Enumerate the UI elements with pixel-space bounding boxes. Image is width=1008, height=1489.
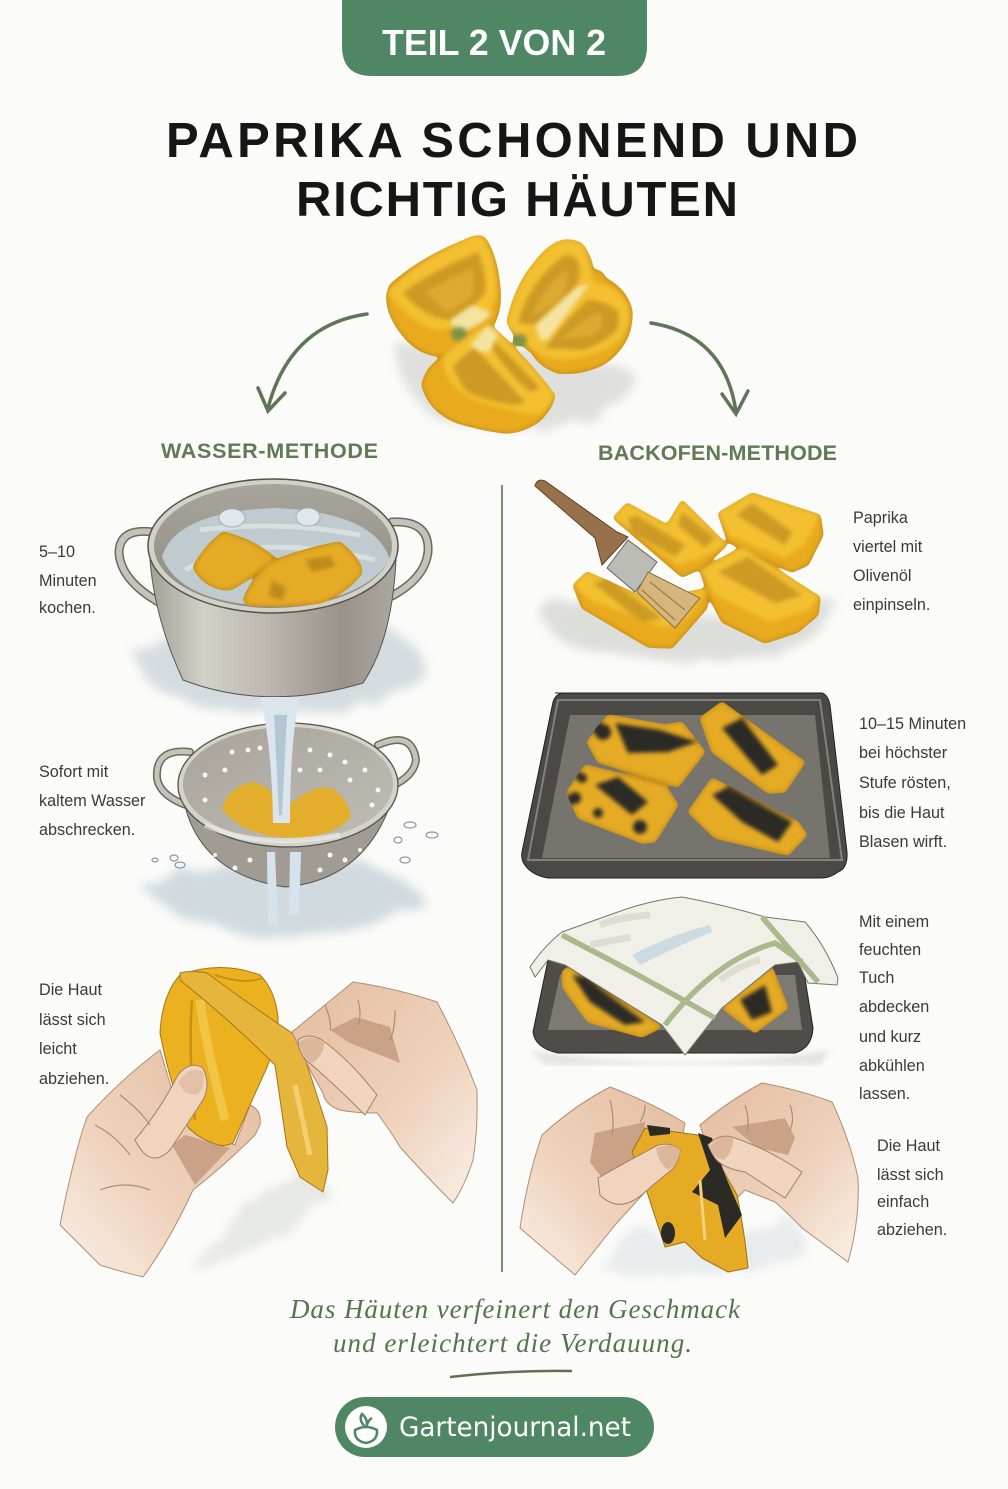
- text: peel step water: Die Haut: [39, 981, 102, 999]
- text: oil step: Paprika: [853, 509, 908, 527]
- text: boil step: [39, 543, 97, 617]
- footer badge: [335, 1397, 654, 1457]
- text: rinse step: kaltem Wasser: [39, 792, 146, 810]
- left thumb: [135, 1065, 207, 1158]
- text: roast step: bis die Haut: [859, 804, 945, 822]
- text: peel step water: [39, 981, 109, 1088]
- peeled skin strip: [180, 972, 328, 1192]
- text: peel step water: leicht: [39, 1040, 77, 1058]
- arrow: to water method: [258, 314, 367, 411]
- text: peel step oven: abziehen.: [877, 1221, 947, 1239]
- text: rinse step: Sofort mit: [39, 763, 109, 781]
- left hand: [520, 1087, 685, 1275]
- closing note: und erleichtert die Verdauung.: [333, 1328, 692, 1358]
- banner: part label: TEIL 2 VON 2: [382, 22, 606, 63]
- underline stroke: [450, 1371, 572, 1377]
- text: peel step oven: [877, 1137, 947, 1239]
- illustration: halved yellow peppers: [387, 236, 632, 433]
- title: RICHTIG HÄUTEN: [296, 173, 738, 227]
- arrow: to oven method: [651, 323, 748, 414]
- text: roast step: 10–15 Minuten: [859, 715, 966, 733]
- text: rinse step: [39, 763, 146, 839]
- closing note: [289, 1294, 741, 1358]
- text: boil step: 5–10: [39, 543, 75, 561]
- roasted pepper pieces: [567, 702, 807, 855]
- text: cover step: abdecken: [859, 998, 929, 1016]
- text: oil step: viertel mit: [853, 538, 923, 556]
- illustration: pot of boiling water: [119, 479, 428, 714]
- title: PAPRIKA SCHONEND UND: [166, 114, 858, 168]
- closing note: Das Häuten verfeinert den Geschmack: [289, 1294, 741, 1324]
- text: cover step: Mit einem: [859, 913, 929, 931]
- text: roast step: [859, 715, 966, 851]
- illustration: colander with running water: [140, 697, 438, 938]
- text: oil step: einpinseln.: [853, 596, 930, 614]
- text: peel step water: lässt sich: [39, 1011, 106, 1029]
- icon: sprout in bowl: [345, 1406, 387, 1448]
- pepper being peeled: [160, 968, 278, 1146]
- heading: oven method: BACKOFEN-METHODE: [598, 441, 837, 465]
- cloth: [530, 897, 838, 1055]
- text: boil step: Minuten: [39, 572, 97, 590]
- text: oil step: [853, 509, 930, 614]
- heading: water method: WASSER-METHODE: [161, 439, 378, 463]
- text: peel step oven: einfach: [877, 1193, 929, 1211]
- banner: part label: [342, 0, 647, 76]
- right hand: [292, 982, 477, 1203]
- illustration: hands removing charred skin: [520, 1083, 858, 1276]
- text: cover step: [859, 913, 929, 1103]
- title: [166, 114, 858, 227]
- illustration: brushing peppers with oil: [535, 480, 835, 661]
- illustration: hands peeling yellow pepper: [60, 968, 477, 1277]
- left hand: [60, 1050, 260, 1277]
- right hand: [700, 1083, 858, 1262]
- text: cover step: und kurz: [859, 1028, 921, 1046]
- text: cover step: lassen.: [859, 1085, 910, 1103]
- illustration: baking tray with roasted peppers: [522, 693, 847, 878]
- text: peel step oven: lässt sich: [877, 1166, 944, 1184]
- text: roast step: bei höchster: [859, 744, 948, 762]
- text: roast step: Stufe rösten,: [859, 774, 951, 792]
- text: peel step oven: Die Haut: [877, 1137, 940, 1155]
- text: rinse step: abschrecken.: [39, 821, 135, 839]
- footer badge: Gartenjournal.net: [399, 1412, 631, 1443]
- right thumb: [298, 1036, 377, 1115]
- text: peel step water: abziehen.: [39, 1070, 109, 1088]
- text: oil step: Olivenöl: [853, 567, 911, 585]
- text: cover step: abkühlen: [859, 1057, 925, 1075]
- text: cover step: Tuch: [859, 969, 894, 987]
- text: cover step: feuchten: [859, 941, 921, 959]
- peeled charred skin: [632, 1128, 748, 1272]
- illustration: peppers covered with damp cloth: [530, 897, 838, 1065]
- text: boil step: kochen.: [39, 599, 96, 617]
- center divider: [501, 485, 503, 1272]
- text: roast step: Blasen wirft.: [859, 833, 947, 851]
- thumbs: [598, 1144, 680, 1204]
